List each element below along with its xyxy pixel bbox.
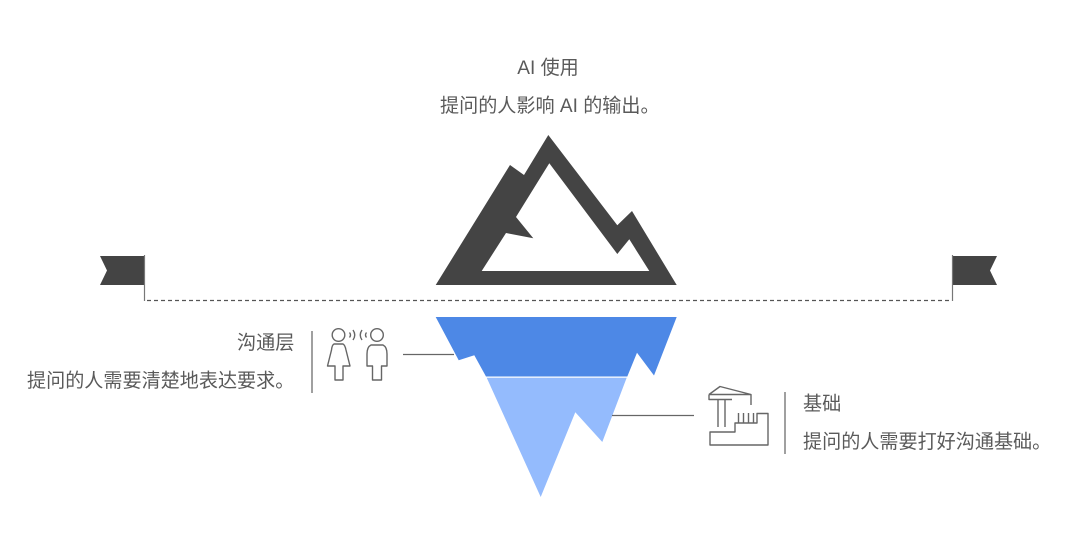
- icon: two people talking: [328, 329, 387, 380]
- text: communication description: 提问的人需要清楚地表达要求。: [27, 371, 294, 392]
- mountain above water: [436, 135, 677, 285]
- left flag: [100, 255, 144, 301]
- dashed waterline: [147, 300, 951, 302]
- iceberg upper layer: communication: [436, 317, 677, 376]
- heading: AI use: AI 使用: [517, 58, 579, 79]
- iceberg lower layer: foundation: [487, 378, 627, 497]
- divider: foundation: [784, 392, 786, 454]
- right flag: [952, 255, 997, 301]
- divider: communication: [311, 331, 313, 393]
- heading: communication layer: 沟通层: [237, 333, 294, 354]
- text: AI use description: 提问的人影响 AI 的输出。: [440, 96, 660, 117]
- connector line: communication: [403, 354, 454, 356]
- text: foundation description: 提问的人需要打好沟通基础。: [803, 432, 1051, 453]
- connector line: foundation: [612, 414, 694, 416]
- heading: foundation: 基础: [803, 394, 841, 415]
- icon: crane and foundation: [709, 386, 768, 445]
